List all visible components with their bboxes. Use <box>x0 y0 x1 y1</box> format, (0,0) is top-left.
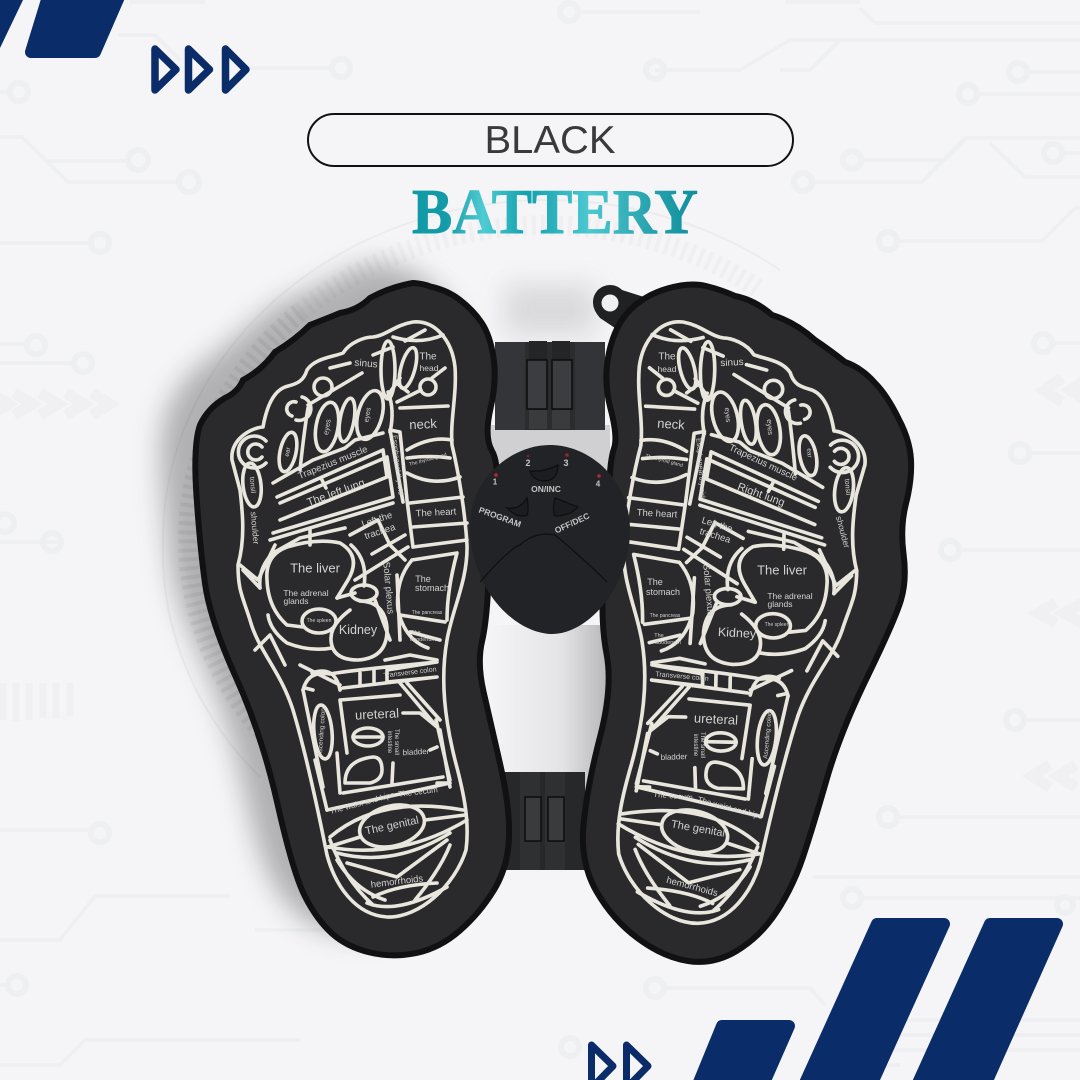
module seam line <box>480 534 607 582</box>
left foot reflexology labels: ear <box>284 446 292 457</box>
control module: OFF/DEC <box>553 511 591 535</box>
left foot reflexology labels: stomach <box>415 583 449 593</box>
left foot reflexology labels: trachea <box>363 522 397 542</box>
right foot reflexology labels: head <box>658 364 677 374</box>
right foot reflexology labels: Ascending colon <box>762 711 774 759</box>
left foot reflexology labels: The <box>411 630 421 636</box>
left foot pad <box>195 283 509 955</box>
right foot reflexology labels: The liver <box>757 562 808 578</box>
right foot reflexology labels: stomach <box>646 587 680 597</box>
right foot reflexology labels: The spleen <box>765 622 790 628</box>
right foot reflexology labels: neck <box>657 416 686 432</box>
right foot reflexology labels: glands <box>767 599 793 609</box>
control module: ON/INC <box>531 484 561 494</box>
left foot reflexology labels: The waist and hips <box>329 790 395 816</box>
right foot reflexology labels: intestine <box>692 734 698 757</box>
left foot reflexology labels: intestine <box>386 731 392 754</box>
right foot reflexology labels: Esophageal thyroid <box>694 438 706 498</box>
left foot reflexology labels: Kidney <box>339 623 378 637</box>
module buttons <box>507 465 578 516</box>
right foot reflexology labels: Left the <box>700 515 734 535</box>
right foot reflexology labels: The <box>647 577 663 587</box>
right foot reflexology labels: The small <box>699 732 705 758</box>
left foot reflexology labels <box>248 352 457 891</box>
left foot reflexology labels: Transverse colon <box>383 666 437 680</box>
left foot reflexology labels: Left the <box>360 510 394 530</box>
left foot reflexology labels: The cecum <box>398 785 439 799</box>
right foot reflexology labels: shoulder <box>834 515 852 549</box>
left foot reflexology labels: tonsil <box>248 477 256 494</box>
right foot reflexology labels: eyes <box>765 419 775 436</box>
right foot reflexology labels: tonsil <box>843 479 851 496</box>
control module: 3 <box>563 458 569 468</box>
left foot reflexology labels: glands <box>283 596 309 606</box>
right foot reflexology labels: ear <box>805 448 813 459</box>
left foot reflexology labels: The liver <box>290 560 341 576</box>
left foot reflexology labels: hemorrhoids <box>370 873 424 891</box>
left foot reflexology labels: Esophageal thyroid <box>390 435 404 495</box>
right foot reflexology labels: sinus <box>720 357 744 369</box>
left foot reflexology labels: The genital <box>364 814 420 838</box>
badge: BLACK capsule: BLACK <box>484 119 616 162</box>
right foot reflexology labels: ureteral <box>694 710 739 728</box>
right foot reflexology labels: Transverse colon <box>655 671 709 683</box>
right foot reflexology labels: The cecum <box>653 790 693 802</box>
left foot reflexology labels: The <box>419 352 437 362</box>
right foot reflexology labels: Kidney <box>718 625 757 641</box>
right foot pad <box>583 284 911 962</box>
control module: 2 <box>525 458 531 468</box>
left foot reflexology labels: Trapezius muscle <box>297 444 369 482</box>
left foot reflexology labels: The heart <box>415 506 457 520</box>
left foot reflexology labels: eyes <box>321 418 333 436</box>
title: BATTERY: BATTERY <box>412 177 698 247</box>
right foot reflexology labels: eyes <box>723 407 731 423</box>
module LEDs and labels <box>494 473 498 477</box>
left foot reflexology labels: neck <box>409 416 438 432</box>
icon: two outlined arrows bottom <box>592 1045 648 1080</box>
left foot reflexology labels: Solar plexus <box>380 561 396 615</box>
left foot reflexology labels: head <box>420 363 439 373</box>
bottom hinge <box>505 772 585 870</box>
right foot reflexology labels: The <box>654 633 664 639</box>
left foot reflexology labels: The <box>415 574 431 584</box>
gap between the two foot pads <box>482 425 617 790</box>
control module: 4 <box>596 480 601 488</box>
left foot reflexology labels: duodenum <box>410 637 436 643</box>
right foot reflexology labels: The genital <box>670 818 726 840</box>
right foot reflexology labels: Trapezius muscle <box>727 442 799 484</box>
decorative bottom-right navy stripes <box>695 924 1057 1080</box>
faint circular gauge behind product <box>163 200 780 777</box>
left foot reflexology labels: bladder <box>402 747 430 757</box>
control module: 1 <box>493 478 498 486</box>
top hinge <box>495 341 605 430</box>
left foot reflexology labels: The left lung <box>306 477 366 509</box>
left foot reflexology labels: The thyroid gland <box>409 452 448 468</box>
icon: three outlined arrows top left <box>155 49 246 90</box>
left foot reflexology labels: ureteral <box>355 705 400 723</box>
right foot reflexology labels: bladder <box>661 752 688 762</box>
product drop shadow <box>161 264 595 935</box>
decorative top-left navy stripes <box>0 0 122 52</box>
right foot reflexology labels: The waist and hips <box>697 795 763 821</box>
left foot reflexology labels: The adrenal <box>283 588 329 598</box>
right foot reflexology labels: The pancreas <box>650 613 681 619</box>
right foot reflexology labels: duodenum <box>655 640 681 646</box>
hanging ring tab <box>593 285 644 330</box>
left foot reflexology labels: The spleen <box>307 618 332 624</box>
badge: BLACK capsule <box>308 114 793 166</box>
left foot reflexology labels: shoulder <box>249 511 261 545</box>
right foot reflexology labels: trachea <box>698 526 732 546</box>
left foot reflexology labels: Ascending colon <box>317 708 327 756</box>
right foot reflexology labels: Right lung <box>736 481 786 509</box>
control module <box>470 445 630 634</box>
left foot reflexology labels: The small <box>393 729 399 755</box>
right foot reflexology labels: The <box>658 352 676 362</box>
left foot reflexology labels: The pancreas <box>412 610 443 616</box>
right foot reflexology labels: hemorrhoids <box>665 875 719 899</box>
right foot reflexology labels: The heart <box>636 507 678 521</box>
right foot reflexology labels: The thyroid gland <box>645 453 684 469</box>
control module: PROGRAM <box>477 505 523 529</box>
left foot reflexology labels: eyes <box>363 407 373 423</box>
right foot reflexology labels: The adrenal <box>767 591 813 601</box>
right foot reflexology labels: Solar plexus <box>700 563 716 617</box>
left foot reflexology labels: sinus <box>354 358 378 370</box>
right foot reflexology labels <box>636 352 852 899</box>
